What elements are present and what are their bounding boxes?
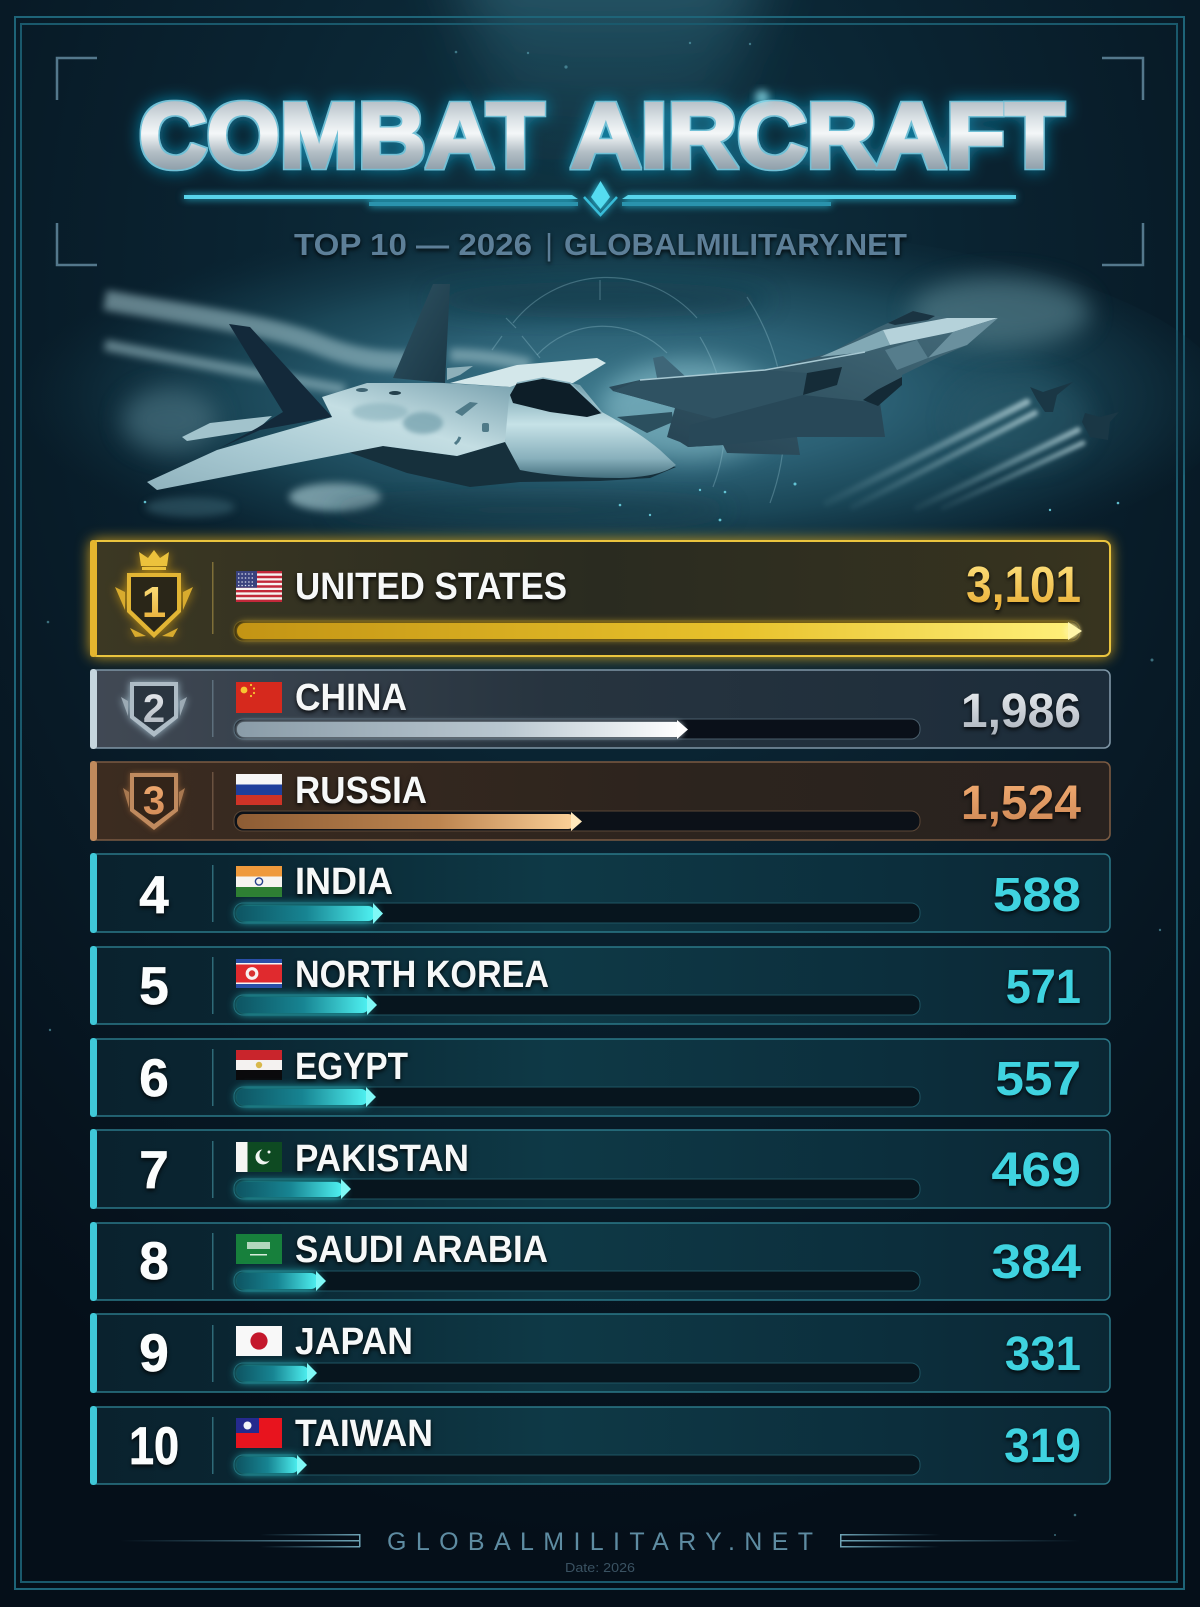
subtitle: GLOBALMILITARY.NET: [564, 227, 907, 262]
bar: [234, 1179, 920, 1199]
row 10: Taiwan: [90, 1406, 1110, 1485]
value: 331: [1005, 1327, 1081, 1380]
country name: RUSSIA: [295, 770, 427, 812]
row 6: Egypt: [90, 1038, 1110, 1117]
country name: CHINA: [295, 677, 407, 719]
separator: [212, 865, 214, 922]
country name: NORTH KOREA: [295, 954, 549, 996]
rank: 5: [139, 957, 169, 1016]
footer date: Date: 2026: [565, 1560, 635, 1575]
bar: [234, 1087, 920, 1107]
flag: North Korea: [236, 959, 282, 988]
bar: [234, 811, 920, 831]
separator: [212, 1049, 214, 1106]
value: 571: [1006, 960, 1081, 1013]
flag: India: [236, 866, 282, 897]
row 7: Pakistan: [90, 1129, 1110, 1209]
subtitle: |: [545, 227, 553, 262]
row 9: Japan: [90, 1313, 1110, 1393]
bar: [234, 1271, 920, 1291]
footer website: GLOBALMILITARY.NET: [387, 1528, 813, 1556]
title: COMBAT: [139, 85, 544, 187]
country name: EGYPT: [295, 1046, 408, 1088]
footer: [120, 1528, 1080, 1575]
badge: silver rank 2: 2: [143, 687, 165, 731]
value: 469: [991, 1143, 1081, 1196]
value: 1,986: [961, 685, 1081, 738]
separator: [212, 1233, 214, 1290]
badge: bronze rank 3: 3: [143, 779, 165, 823]
separator: [212, 562, 214, 634]
value: 384: [991, 1235, 1082, 1288]
value: 588: [993, 867, 1081, 921]
rank: 4: [139, 866, 169, 925]
separator: [212, 772, 214, 830]
targeting reticle: [492, 277, 784, 503]
flag: Saudi Arabia: [236, 1234, 282, 1264]
country name: PAKISTAN: [295, 1138, 469, 1180]
value: 3,101: [966, 557, 1081, 614]
row 1: United States: [90, 540, 1110, 657]
separator: [212, 957, 214, 1014]
separator: [212, 1141, 214, 1198]
value: 557: [995, 1052, 1081, 1106]
corner brackets: [57, 58, 1143, 265]
flag: Japan: [236, 1326, 282, 1356]
badge: gold rank 1: [115, 550, 193, 638]
row 2: China: [90, 669, 1110, 749]
flag: Pakistan: [236, 1142, 282, 1172]
country name: SAUDI ARABIA: [295, 1229, 548, 1271]
bar: [234, 903, 920, 924]
subtitle: TOP 10 — 2026: [294, 227, 532, 262]
row 4: India: [90, 853, 1110, 933]
rank: 6: [139, 1049, 169, 1108]
country name: TAIWAN: [295, 1413, 433, 1455]
title: [139, 85, 1064, 187]
row 8: Saudi Arabia: [90, 1222, 1110, 1301]
title divider with diamond: [184, 181, 1016, 215]
left contrails: [105, 300, 530, 390]
rear jet: [609, 311, 998, 455]
row 5: North Korea: [90, 946, 1110, 1025]
rank: 7: [139, 1141, 169, 1200]
badge: gold rank 1: 1: [142, 578, 166, 627]
rank: 9: [139, 1324, 169, 1383]
flag: China: [236, 682, 282, 713]
front jet surface details: [352, 388, 489, 444]
separator: [212, 1325, 214, 1382]
value: 1,524: [961, 777, 1081, 830]
country name: INDIA: [295, 861, 393, 903]
badge: bronze rank 3: [123, 773, 185, 830]
flag: Taiwan: [236, 1418, 282, 1448]
flag: Russia: [236, 774, 282, 805]
small distant jets: [1030, 382, 1119, 440]
subtitle: [294, 227, 907, 262]
separator: [212, 680, 214, 737]
flag: Egypt: [236, 1050, 282, 1080]
rank: 10: [129, 1417, 179, 1476]
flag: USA: [236, 571, 282, 602]
badge: silver rank 2: [121, 682, 187, 737]
value: 319: [1004, 1418, 1081, 1472]
hero illustration: fighter jets: [0, 220, 1200, 590]
front jet F-22 style: [147, 284, 676, 490]
bar: [234, 1455, 920, 1475]
bar: [234, 1363, 920, 1383]
country name: JAPAN: [295, 1321, 413, 1363]
sky and clouds: [0, 220, 1200, 590]
bar: [234, 995, 920, 1015]
rank: 8: [139, 1232, 169, 1291]
sparks: [144, 482, 1119, 521]
bar: [234, 719, 920, 739]
separator: [212, 1417, 214, 1474]
country name: UNITED STATES: [295, 566, 567, 608]
row 3: Russia: [90, 761, 1110, 841]
title: AIRCRAFT: [571, 85, 1064, 187]
right contrails: [827, 402, 1083, 508]
bar: [234, 621, 1082, 641]
